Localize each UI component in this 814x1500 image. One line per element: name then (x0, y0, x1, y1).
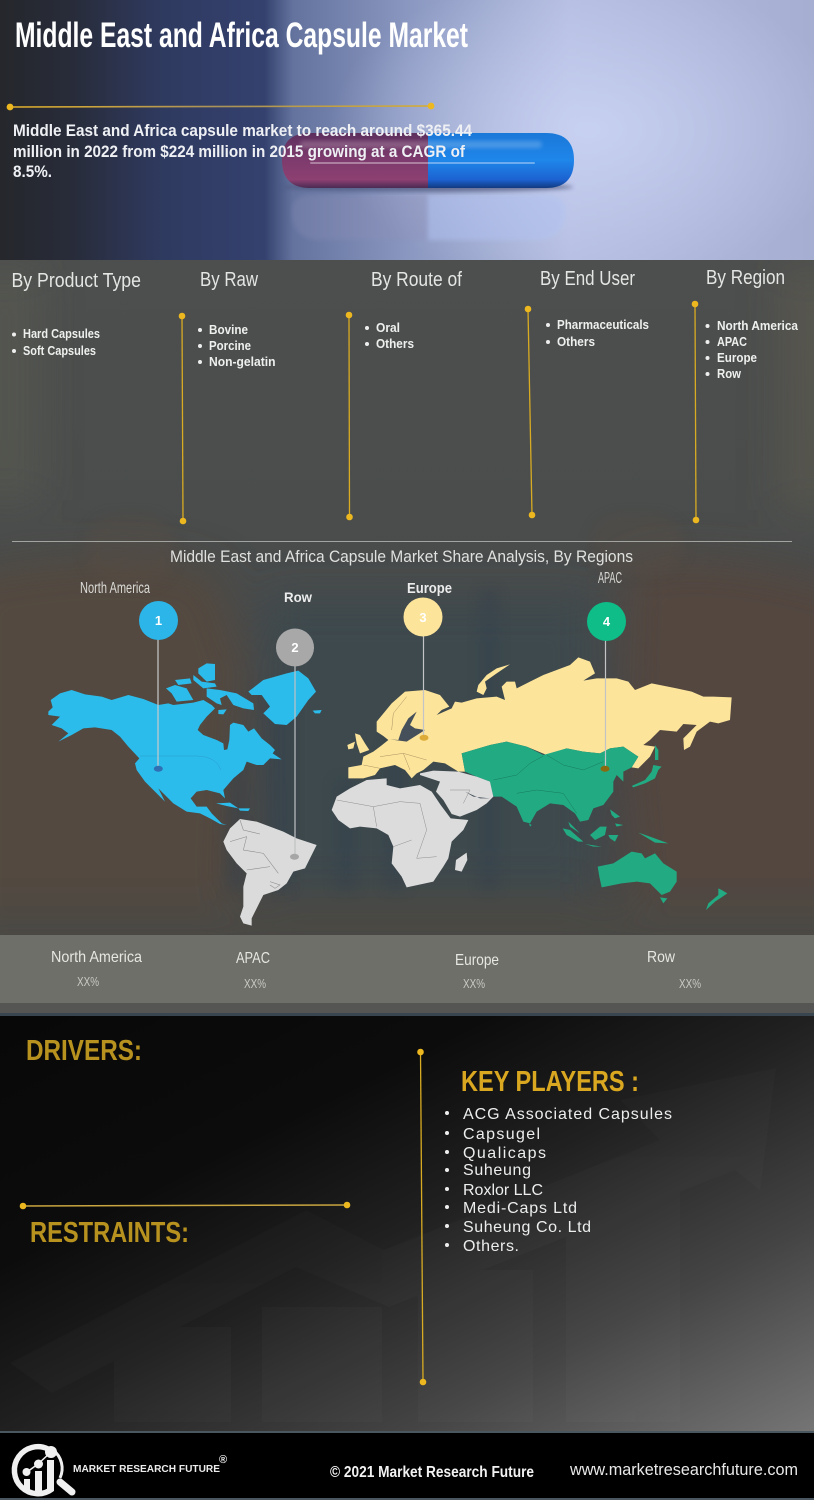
brand name: MARKET RESEARCH FUTURE (73, 1463, 220, 1475)
heading: by product type: By Product Type (12, 270, 141, 292)
registered mark: ® (219, 1454, 227, 1466)
summary text (13, 121, 472, 181)
connector line 1 (179, 313, 186, 524)
pin 4: apac: 4 (603, 614, 611, 629)
panel: regional share legend: XX% (77, 975, 99, 989)
panel: segments and map background (0, 260, 814, 1016)
list: key players: Suheung Co. Ltd (463, 1219, 591, 1236)
summary text: Middle East and Africa capsule market to reach around $365.44 (13, 121, 472, 140)
list: key players: Medi-Caps Ltd (463, 1200, 577, 1217)
list: routes (365, 320, 414, 351)
pin label: north america: North America (80, 580, 150, 597)
list: key players: Roxlor LLC (463, 1182, 543, 1199)
connector line 2 (346, 312, 353, 520)
copyright: © 2021 Market Research Future (330, 1464, 534, 1481)
heading: market share analysis: Middle East and Africa Capsule Market Share Analysis, By Regions (170, 547, 633, 566)
heading: by end user: By End User (540, 268, 635, 290)
map: europe and russia (347, 657, 732, 778)
panel: regional share legend: XX% (463, 977, 485, 991)
list: routes: Others (376, 336, 414, 351)
panel: regional share legend: Row (647, 949, 675, 966)
panel: regional share legend: APAC (236, 950, 270, 967)
summary text: million in 2022 from $224 million in 2015 growing at a CAGR of (13, 142, 465, 161)
list: regions: Row (717, 366, 742, 381)
pin label: row: Row (284, 589, 312, 605)
panel: regional share legend: North America (51, 949, 142, 966)
icon: capsule (282, 133, 574, 192)
panel: drivers restraints and key players (0, 1013, 814, 1432)
pin 2: row: 2 (291, 640, 299, 655)
list: end users: Pharmaceuticals (557, 317, 649, 332)
panel: regional share legend (0, 935, 814, 1013)
heading: key players: KEY PLAYERS : (461, 1066, 639, 1098)
list: routes: Oral (376, 320, 400, 335)
panel: regional share legend: XX% (244, 977, 266, 991)
icon: capsule reflection (292, 195, 566, 240)
map: north america (48, 663, 322, 825)
list: raw materials: Bovine (209, 322, 248, 337)
background chart arrow (10, 1068, 776, 1422)
list: product types: Hard Capsules (23, 326, 100, 341)
list: raw materials: Porcine (209, 338, 251, 353)
list: key players: Others. (463, 1238, 519, 1255)
website: www.marketresearchfuture.com (569, 1460, 798, 1479)
map: asia pacific (462, 742, 727, 910)
list: key players: Suheung (463, 1162, 531, 1179)
divider line (20, 1202, 350, 1209)
panel: regional share legend: XX% (679, 977, 701, 991)
map: africa and middle east (332, 771, 493, 887)
heading: by route of: By Route of (371, 269, 462, 291)
panel: regional share legend: Europe (455, 952, 499, 969)
list: key players: ACG Associated Capsules (463, 1106, 672, 1123)
pin 3: europe (404, 598, 442, 741)
list: regions: APAC (717, 334, 748, 349)
pin label: apac: APAC (598, 570, 622, 587)
pin 1: north america (139, 601, 178, 772)
connector line 3 (525, 306, 535, 518)
list: regions: North America (717, 318, 799, 333)
world map (48, 657, 732, 926)
heading: by raw: By Raw (200, 269, 258, 291)
pin label: europe: Europe (407, 580, 452, 597)
heading: drivers: DRIVERS: (26, 1035, 142, 1067)
list: product types: Soft Capsules (23, 343, 96, 358)
list: raw materials: Non-gelatin (209, 354, 276, 369)
panel: hero banner (0, 0, 814, 290)
pin 1: north america: 1 (155, 613, 162, 628)
list: key players: Qualicaps (463, 1145, 546, 1162)
map: south america (223, 819, 317, 926)
list: regions: Europe (717, 350, 757, 365)
list: raw materials (198, 322, 276, 369)
list: key players: Capsugel (463, 1126, 540, 1143)
panel: footer (0, 1431, 814, 1500)
heading: by region: By Region (706, 267, 785, 289)
list: end users: Others (557, 334, 595, 349)
divider line with dots (7, 103, 434, 110)
pin 3: europe: 3 (419, 610, 427, 625)
list: regions (706, 318, 799, 381)
pin 2: row (276, 628, 314, 860)
heading: restraints: RESTRAINTS: (30, 1217, 189, 1249)
pin 4: apac (587, 602, 626, 772)
list: end users (546, 317, 649, 349)
list: product types (12, 326, 100, 358)
vertical connector (417, 1049, 426, 1385)
title: Middle East and Africa Capsule Market (15, 16, 468, 55)
summary text: 8.5%. (13, 162, 52, 181)
list: key players (445, 1106, 672, 1255)
connector line 4 (692, 301, 699, 523)
icon: market research future logo (14, 1446, 72, 1494)
